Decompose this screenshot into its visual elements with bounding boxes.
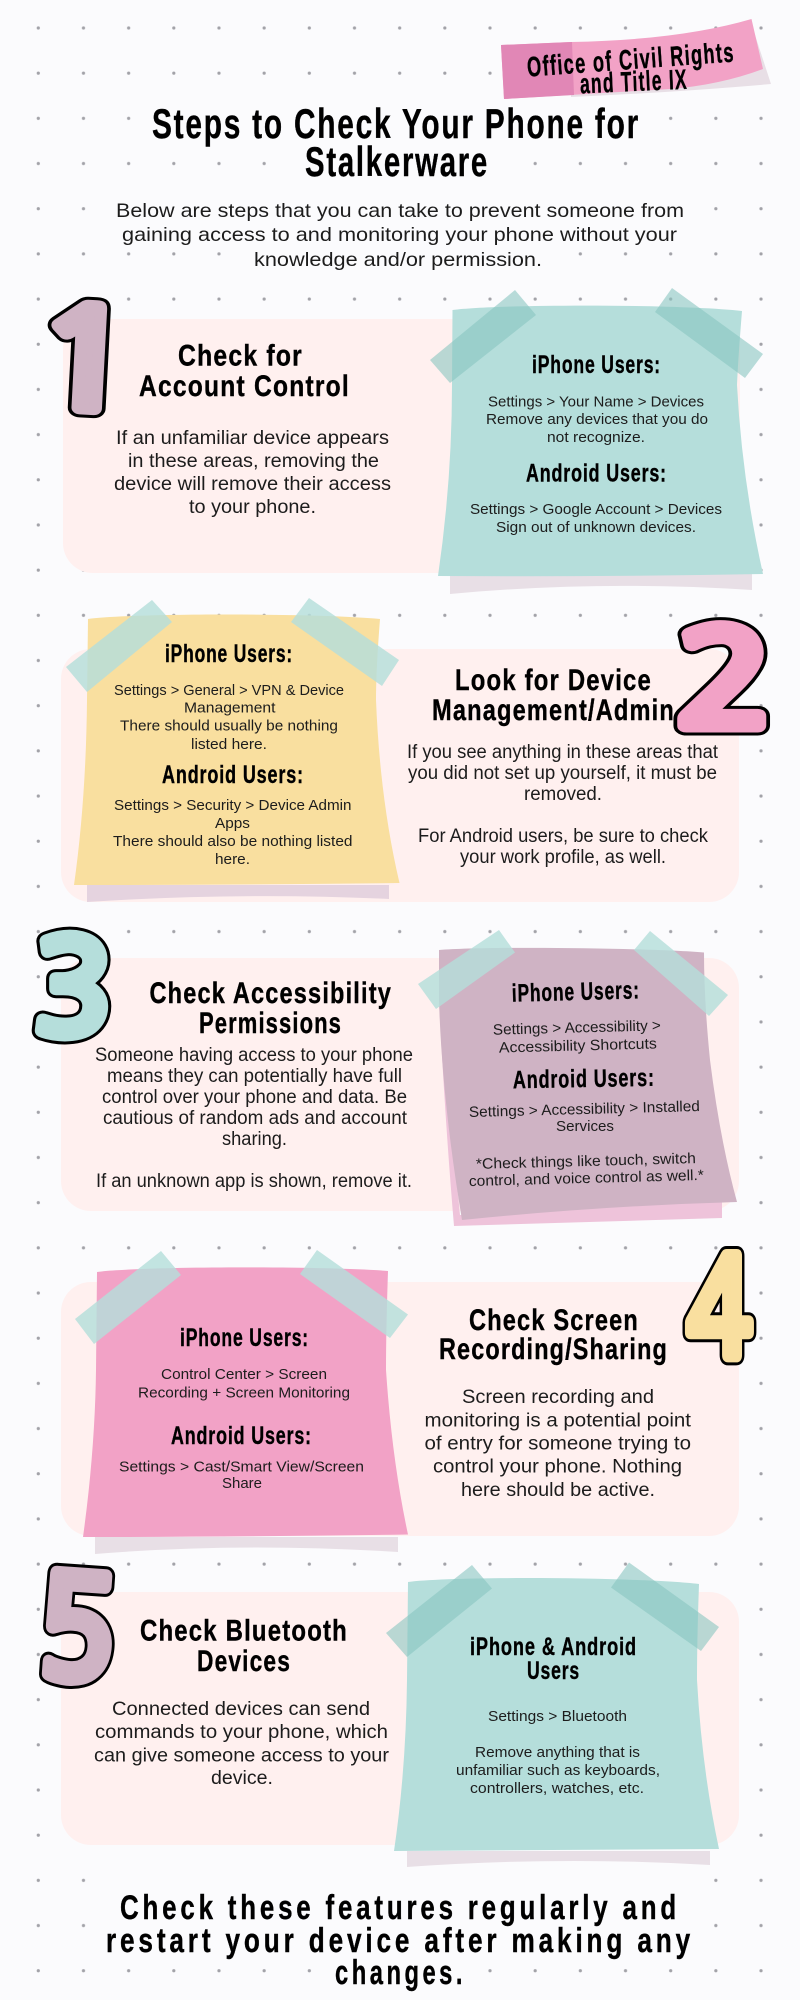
intro text: Below are steps that you can take to prevent someone from [116,200,684,222]
panel background 1 [63,319,740,573]
sticky note: iPhone and Android steps: Services [556,1118,614,1135]
number 4: 4 [686,1244,753,1378]
closing statement [106,1889,694,1992]
body text: removed. [524,784,602,805]
number 3: 3 [32,925,114,1055]
intro text [116,200,684,271]
sticky note: iPhone and Android steps: Remove any devices that you do [486,411,708,428]
sticky note: iPhone and Android steps [430,288,763,594]
body text: device will remove their access [114,474,391,495]
sticky note: iPhone and Android steps: iPhone Users: [180,1324,309,1352]
body text: of entry for someone trying to [424,1434,691,1454]
title [152,100,640,185]
panel: step 4 screen recording [61,1244,753,1554]
heading: check screen recording: Recording/Sharing [439,1333,668,1366]
sticky note: iPhone and Android steps: iPhone & Android [470,1633,637,1661]
panel: step 5 bluetooth devices [32,1559,739,1867]
heading: check for account control: Account Control [139,370,350,403]
sticky note: iPhone and Android steps: Control Center > Screen [161,1366,327,1383]
heading: look for device management [432,664,675,727]
sticky note: iPhone and Android steps: control, and voice control as well.* [469,1167,704,1190]
panel: step 2 device management [61,598,775,902]
body text: commands to your phone, which [95,1722,388,1743]
body text: monitoring is a potential point [424,1410,692,1432]
body text: in these areas, removing the [128,451,379,472]
number 4: 4 [686,1244,753,1378]
sticky note: iPhone and Android steps: controllers, watches, etc. [470,1780,644,1797]
sticky note: iPhone and Android steps: listed here. [191,736,267,753]
heading: check screen recording [439,1304,668,1366]
sticky note: iPhone and Android steps: Recording + Screen Monitoring [138,1384,350,1402]
panel background 3 [61,958,739,1211]
sticky note: iPhone and Android steps: Settings > Google Account > Devices [470,501,722,518]
body text: cautious of random ads and account [103,1108,408,1129]
heading: check bluetooth devices: Check Bluetooth [140,1615,348,1648]
sticky note: iPhone and Android steps: Settings > Cast/Smart View/Screen [119,1459,364,1476]
sticky note: iPhone and Android steps [386,1562,719,1867]
number 2: 2 [674,615,775,747]
sticky note: iPhone and Android steps: not recognize. [547,429,645,446]
sticky note: iPhone and Android steps: Android Users: [526,460,667,488]
sticky note: iPhone and Android steps: Settings > Bluetooth [488,1708,627,1725]
number 3: 3 [32,925,114,1055]
sticky note: iPhone and Android steps: Sign out of unknown devices. [496,519,696,536]
number 1: 1 [30,291,140,433]
body text: If you see anything in these areas that [407,742,719,763]
sticky note: iPhone and Android steps [75,1250,408,1554]
title: Stalkerware [305,138,489,185]
body text: If an unfamiliar device appears [116,428,389,449]
sticky note: iPhone and Android steps: Android Users: [171,1422,312,1450]
body text: to your phone. [189,497,316,518]
panel background 5 [61,1592,739,1845]
body text: Someone having access to your phone [95,1045,413,1066]
heading: check accessibility permissions [150,977,392,1040]
sticky note: iPhone and Android steps: Users [527,1657,580,1685]
banner: Office of Civil Rights and Title IX [501,19,771,99]
panel: step 3 accessibility permissions [32,925,739,1226]
sticky note: iPhone and Android steps: Settings > Accessibility > Installed [469,1098,700,1121]
banner: Office of Civil Rights and Title IX: and Title IX [579,64,688,99]
body text: sharing. [222,1129,287,1150]
heading: check for account control [139,340,350,403]
sticky note: iPhone and Android steps: Android Users: [513,1064,655,1094]
sticky note: iPhone and Android steps: Settings > Accessibility > [493,1017,661,1039]
body text [94,1699,390,1789]
body text: control your phone. Nothing [433,1457,682,1478]
heading: check bluetooth devices: Devices [197,1645,291,1678]
sticky note: iPhone and Android steps: There should also be nothing listed [113,833,352,850]
heading: check screen recording: Check Screen [469,1304,639,1337]
body text: your work profile, as well. [460,847,666,868]
number 5: 5 [32,1559,121,1705]
body text: control over your phone and data. Be [102,1087,407,1108]
body text: If an unknown app is shown, remove it. [96,1171,412,1192]
sticky note: iPhone and Android steps: Remove anything that is [475,1744,640,1761]
sticky note: iPhone and Android steps: Settings > Security > Device Admin [114,797,352,814]
heading: look for device management: Look for Device [455,664,652,697]
sticky note: iPhone and Android steps: Settings > General > VPN & Device [114,682,344,699]
panel: step 1 account control [30,288,763,594]
sticky note: iPhone and Android steps: iPhone Users: [511,976,640,1008]
body text: means they can potentially have full [107,1066,402,1087]
intro text: knowledge and/or permission. [254,249,542,271]
heading: check accessibility permissions: Permissions [199,1007,342,1040]
sticky note: iPhone and Android steps [418,930,737,1226]
sticky note: iPhone and Android steps: Apps [215,815,250,832]
body text [424,1387,692,1501]
panel background 4 [61,1282,739,1536]
body text [95,1045,413,1192]
body text: Screen recording and [462,1387,654,1408]
body text [114,428,391,518]
sticky note: iPhone and Android steps: Management [184,700,276,717]
sticky note: iPhone and Android steps: *Check things like touch, switch [476,1150,696,1173]
body text [407,742,719,868]
number 2: 2 [674,615,775,747]
body text: Connected devices can send [112,1699,370,1720]
sticky note: iPhone and Android steps: iPhone Users: [532,351,661,379]
sticky note: iPhone and Android steps: There should usually be nothing [120,718,338,735]
closing statement: changes. [335,1954,466,1992]
heading: check for account control: Check for [178,340,303,372]
sticky note: iPhone and Android steps: iPhone Users: [165,640,293,668]
sticky note: iPhone and Android steps: Share [222,1475,262,1492]
number 1: 1 [30,291,140,433]
panel background 2 [61,649,739,902]
number 5: 5 [32,1559,121,1705]
body text: you did not set up yourself, it must be [408,763,717,784]
heading: check bluetooth devices [140,1615,348,1678]
body text: can give someone access to your [94,1745,390,1766]
sticky note: iPhone and Android steps: here. [215,851,250,868]
intro text: gaining access to and monitoring your phone without your [122,224,678,246]
heading: look for device management: Management/Admin [432,694,675,727]
sticky note: iPhone and Android steps: Settings > Your Name > Devices [488,394,704,410]
sticky note: iPhone and Android steps: unfamiliar such as keyboards, [456,1762,660,1779]
sticky note: iPhone and Android steps [66,598,400,902]
heading: check accessibility permissions: Check Accessibility [150,977,392,1010]
body text: For Android users, be sure to check [418,826,708,847]
body text: device. [211,1768,273,1789]
sticky note: iPhone and Android steps: Accessibility Shortcuts [499,1035,657,1057]
sticky note: iPhone and Android steps: Android Users: [162,761,304,789]
body text: here should be active. [461,1480,655,1501]
